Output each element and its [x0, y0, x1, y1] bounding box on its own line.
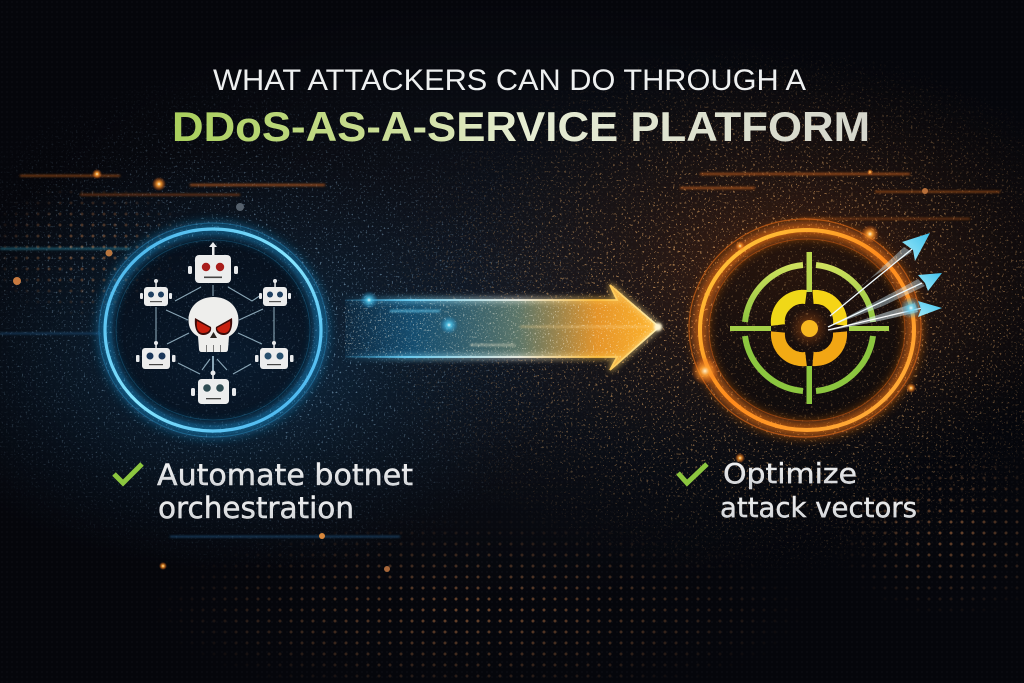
arrow: upper vector [830, 233, 930, 316]
title line 1: WHAT ATTACKERS CAN DO THROUGH A [213, 64, 806, 97]
arrows: attack vectors [828, 233, 942, 331]
callout: optimize attack vectors [678, 457, 917, 524]
network links [156, 285, 274, 374]
callout text: orchestration [158, 491, 354, 525]
callout text: attack vectors [720, 491, 917, 524]
title line 2: DDoS-AS-A-SERVICE PLATFORM [172, 103, 870, 150]
robot: upper right [259, 279, 291, 306]
blue ring [99, 223, 327, 437]
arrow: lower vector [828, 297, 942, 331]
callout text: Automate botnet [157, 458, 413, 492]
robot: lower right [255, 341, 294, 369]
target bullseye [778, 297, 840, 359]
panel: attack vector target emblem [689, 219, 942, 437]
target crosshair [730, 252, 889, 404]
arrow: middle vector [828, 273, 942, 327]
arrow: blue to orange flow [345, 285, 665, 371]
robot: lower left [136, 341, 176, 369]
icon: check mark [114, 464, 142, 483]
robot: upper left [140, 279, 172, 306]
callout text: Optimize [723, 457, 857, 490]
orange ring [689, 219, 921, 437]
panel: botnet orchestration emblem [99, 223, 327, 437]
icon: check mark [678, 464, 707, 483]
callout text [720, 457, 917, 524]
callout text [157, 458, 413, 525]
robot: bottom [191, 370, 236, 404]
icon: skull [188, 297, 238, 352]
callout: automate botnet orchestration [114, 458, 413, 525]
title [172, 64, 870, 150]
robot: top [188, 242, 238, 283]
